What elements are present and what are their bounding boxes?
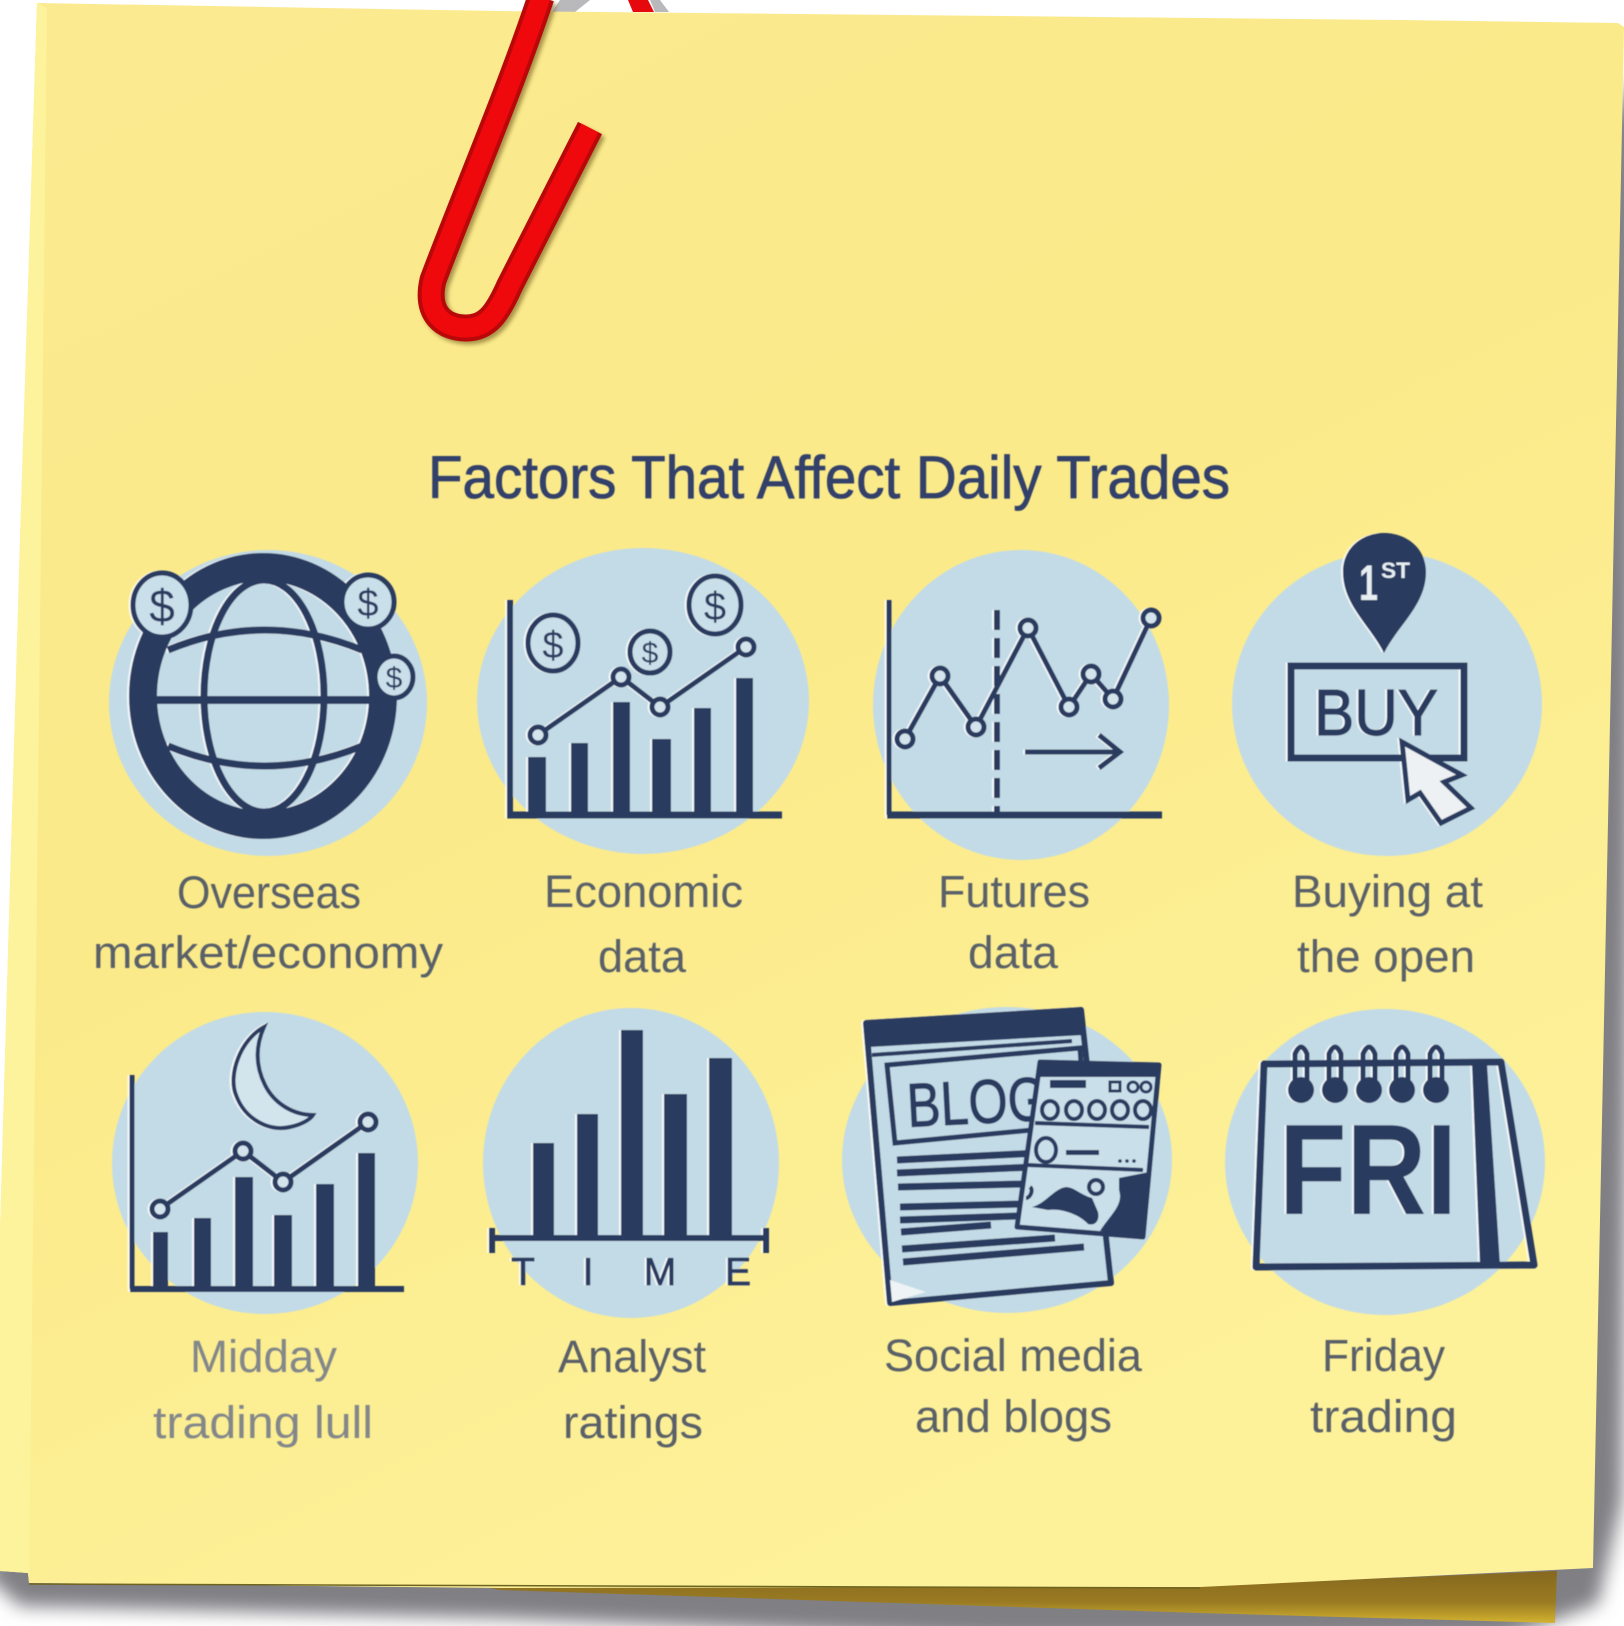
icon: bar and line chart with coins: $ [642,637,659,670]
icon: blog page and phone card [866,1010,1159,1303]
icon: bars over time axis: T [511,1251,535,1294]
panel: social media and blogs [842,1007,1172,1442]
icon: moon over chart [130,1027,404,1289]
panel: futures data [873,550,1169,978]
icon: first pin, buy button and cursor: BUY [1314,676,1438,749]
icon: globe with coins: $ [149,580,175,632]
label: Midday [190,1331,337,1382]
panel: analyst ratings [483,1008,779,1448]
panel: midday trading lull [112,1012,418,1448]
label: Analyst [558,1331,706,1382]
label [558,1331,706,1448]
label: the open [1297,931,1475,982]
blue circle [112,1012,418,1314]
blue circle [1225,1009,1545,1315]
icon: first pin, buy button and cursor [1291,533,1471,823]
label [1310,1330,1457,1442]
label: Friday [1322,1330,1445,1381]
icon: globe with coins: $ [357,583,379,625]
label [93,867,444,978]
icon: bars over time axis: I [583,1251,593,1294]
blue circle [842,1007,1172,1313]
label: data [598,931,687,982]
icon: blog page and phone card: BLOG [905,1065,1049,1141]
label: trading [1310,1391,1457,1442]
icon: bars over time axis: M [644,1251,676,1294]
label: Economic [544,866,743,917]
icon: friday calendar [1256,1047,1534,1267]
icon: bar and line chart with coins [507,576,782,815]
label: data [968,927,1059,978]
icon: globe with coins [133,567,413,825]
icon: first pin, buy button and cursor: ST [1381,558,1411,583]
blue circle [483,1008,779,1318]
icon: friday calendar: FRI [1279,1098,1457,1242]
blue circle [477,548,809,854]
label [1292,866,1484,982]
label: Buying at [1292,866,1484,917]
underlying folded sheet edge [480,1571,1557,1623]
label [544,866,743,982]
label [884,1330,1143,1442]
blue circle [109,550,427,856]
label: Social media [884,1330,1143,1381]
label: ratings [563,1397,703,1448]
label: trading lull [153,1397,373,1448]
icon: bars over time axis: E [725,1251,751,1294]
label: market/economy [93,927,444,978]
icon: first pin, buy button and cursor: 1 [1359,555,1378,611]
icon: globe with coins: $ [386,662,403,695]
paperclip [431,0,593,331]
label [938,866,1090,978]
blue circle [873,550,1169,860]
label: and blogs [915,1391,1112,1442]
panel: buying at the open [1232,533,1542,982]
label: Futures [938,866,1090,917]
panel: overseas market [93,550,444,978]
label: Overseas [177,867,361,918]
label [153,1331,373,1448]
blue circle [1232,552,1542,856]
icon: bar and line chart with coins: $ [704,585,726,629]
panel: friday trading [1225,1009,1545,1442]
title: Factors That Affect Daily Trades [428,444,1230,511]
icon: bar and line chart with coins: $ [542,625,564,667]
icon: bars over time axis [492,1030,766,1294]
clip wire behind the note [552,0,669,12]
panel: economic data [477,548,809,982]
icon: futures line chart [887,600,1162,815]
